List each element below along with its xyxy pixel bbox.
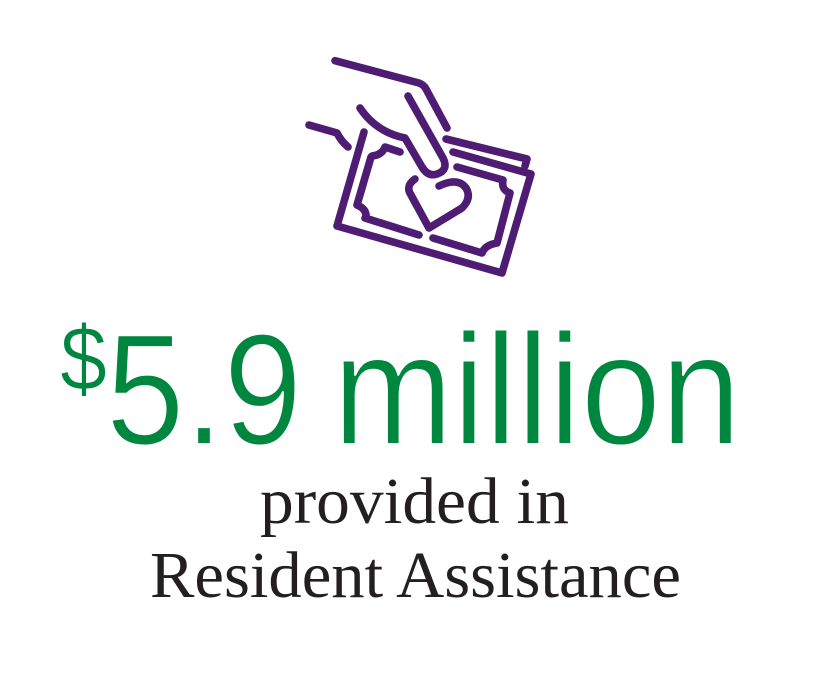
caption line 1: provided in — [260, 465, 569, 538]
caption line 2: Resident Assistance — [150, 539, 681, 612]
headline: 5.9: 5.9 — [106, 302, 302, 478]
dollar sign: $ — [60, 308, 107, 410]
headline: million: million — [333, 302, 741, 478]
icon: banknote — [337, 132, 531, 273]
icon: hand outline — [309, 61, 447, 175]
icon: hand placing heart banknote — [309, 61, 531, 273]
icon: heart — [409, 179, 468, 228]
